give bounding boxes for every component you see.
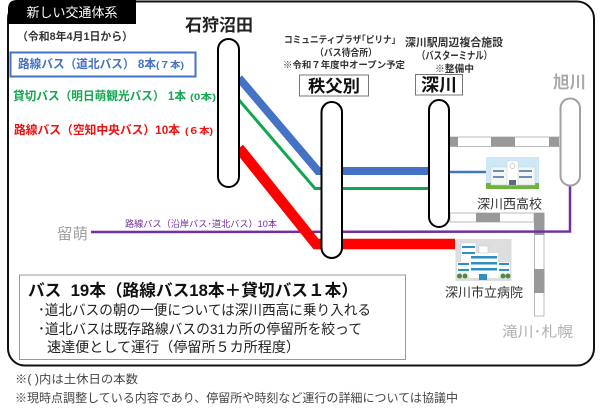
legend: chartered bus: 貸切バス（明日萌観光バス） 1本 bbox=[13, 89, 186, 103]
station: Fukagawa bbox=[405, 35, 503, 227]
legend: Dohoku bus: (７本) bbox=[156, 59, 184, 70]
summary bullet one: ･道北バスの朝の一便については深川西高に乗り入れる bbox=[38, 302, 371, 318]
station: Chichibubetsu: ※令和７年度中オープン予定 bbox=[283, 59, 405, 70]
station: Fukagawa: 深川駅周辺複合施設 bbox=[405, 35, 503, 49]
legend: Sorachi Chuo bus: 路線バス（空知中央バス）10本 bbox=[14, 123, 180, 137]
station: Chichibubetsu bbox=[283, 34, 405, 258]
route: purple coastal bus line bbox=[91, 185, 570, 232]
rail line: east to Asahikawa bbox=[450, 137, 560, 146]
station: Fukagawa: （バスターミナル） bbox=[417, 49, 492, 62]
station: Chichibubetsu: （バス待合所） bbox=[315, 47, 377, 59]
route: red Sorachi Chuo bus line bbox=[239, 148, 455, 244]
legend: chartered bus: (0本) bbox=[190, 91, 216, 102]
heading: new transport system tab: 新しい交通体系 bbox=[26, 5, 118, 20]
icon: Fukagawa city hospital bbox=[456, 239, 512, 281]
legend: Dohoku bus: 路線バス（道北バス） 8本 bbox=[18, 56, 156, 71]
panel: summary box bbox=[20, 275, 406, 360]
route: blue Dohoku bus line bbox=[239, 78, 486, 172]
station: Chichibubetsu: コミュニティプラザ｢ピリナ｣ bbox=[284, 34, 396, 46]
station: Ishikari-Numata: 石狩沼田 bbox=[185, 16, 253, 35]
label: Fukagawa Nishi high school: 深川西高校 bbox=[477, 196, 542, 212]
rail line: south to Takikawa and Sapporo bbox=[450, 213, 544, 316]
summary bullet two: ･道北バスは既存路線バスの31カ所の停留所を絞って bbox=[38, 321, 362, 337]
heading: new transport system tab bbox=[8, 0, 136, 24]
station: Asahikawa bbox=[553, 73, 586, 186]
station: Ishikari-Numata bbox=[185, 16, 253, 187]
station: Asahikawa: 旭川 bbox=[553, 73, 586, 92]
station: Fukagawa: 深川 bbox=[421, 75, 457, 95]
footnote: details under discussion: ※現時点調整している内容であり、停留所や時刻など運行の詳細については協議中 bbox=[15, 391, 458, 405]
summary bullet two continued: 速達便として運行（停留所５カ所程度） bbox=[47, 339, 300, 355]
label: Takikawa and Sapporo: 滝川･札幌 bbox=[502, 324, 574, 341]
label: Fukagawa city hospital: 深川市立病院 bbox=[445, 285, 523, 300]
label: coastal and Dohoku bus 10 services: 路線バス（沿岸バス･道北バス）10本 bbox=[125, 218, 278, 229]
footnote: parenthesis meaning: ※( )内は土休日の本数 bbox=[15, 372, 139, 386]
summary heading: バス 19本（路線バス18本＋貸切バス１本） bbox=[28, 280, 358, 300]
legend: Sorachi Chuo bus: (６本) bbox=[185, 125, 213, 136]
legend: Dohoku bus bbox=[10, 52, 196, 76]
route: green chartered bus line bbox=[239, 100, 430, 188]
text: effective date: （令和8年4月1日から） bbox=[17, 29, 133, 43]
station: Fukagawa: ※整備中 bbox=[435, 63, 474, 75]
station: Chichibubetsu: 秩父別 bbox=[308, 76, 360, 96]
icon: Fukagawa Nishi high school bbox=[486, 157, 539, 189]
label: Rumoi: 留萌 bbox=[57, 225, 88, 243]
